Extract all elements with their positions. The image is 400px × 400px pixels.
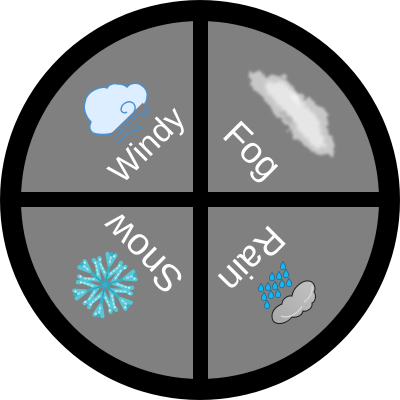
panel: Fog bbox=[208, 21, 379, 192]
icon: fog cloud bbox=[250, 70, 333, 155]
panel: Rain bbox=[208, 207, 379, 379]
panel: Windy bbox=[21, 21, 193, 192]
label: Windy: Windy bbox=[101, 99, 192, 190]
label: Fog: Fog bbox=[215, 113, 289, 187]
label: Snow: Snow bbox=[95, 204, 192, 301]
icon: rain cloud bbox=[258, 261, 315, 324]
icon: windy cloud bbox=[84, 83, 150, 144]
panel: Snow bbox=[21, 207, 193, 379]
label: Rain: Rain bbox=[210, 218, 293, 301]
icon: snowflake bbox=[66, 247, 144, 323]
